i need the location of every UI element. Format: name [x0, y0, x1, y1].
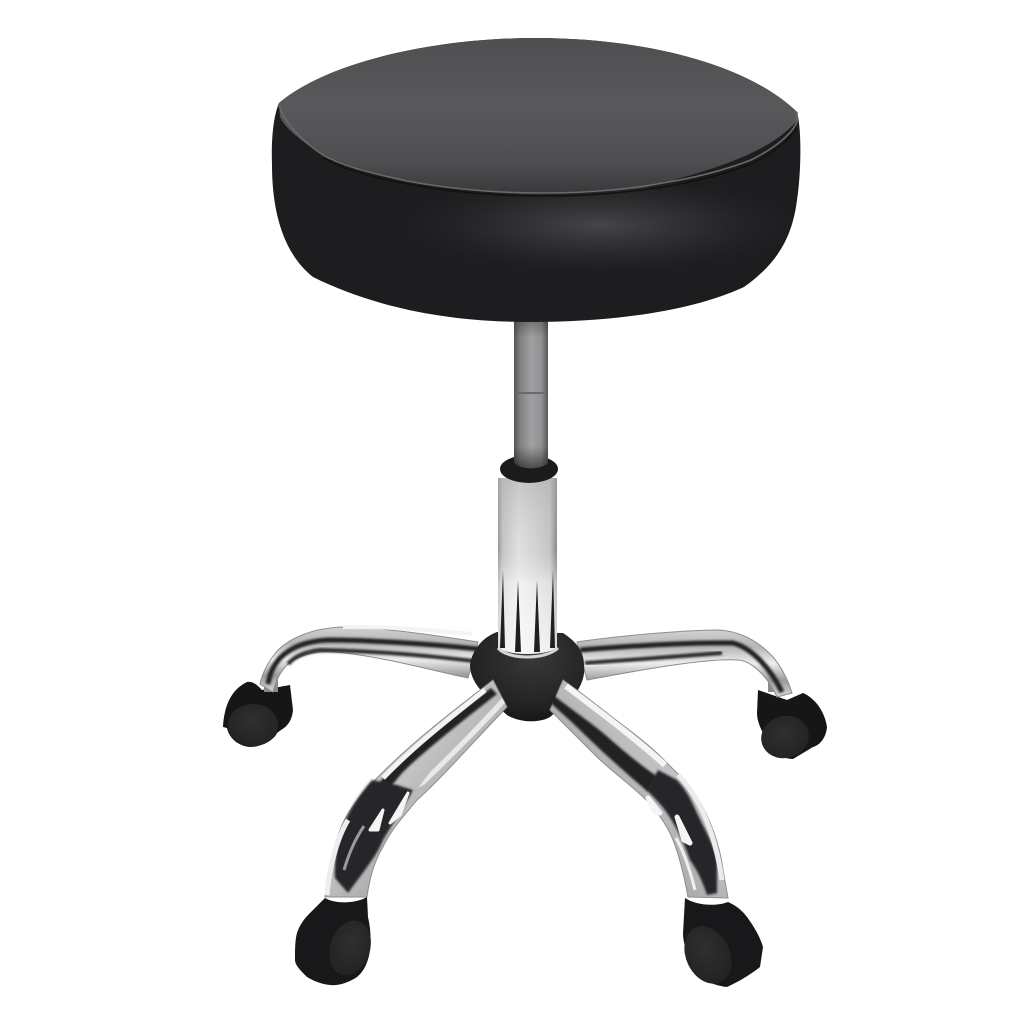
- caster: back left: [223, 678, 293, 747]
- caster: front left: [295, 897, 378, 985]
- stool photo illustration: [223, 38, 827, 987]
- seat cushion: [272, 38, 800, 322]
- leg: back right: [577, 630, 792, 697]
- chrome cylinder: [498, 478, 558, 657]
- gas lift rod: [514, 320, 548, 468]
- caster: front right: [675, 898, 763, 991]
- leg: front right: [550, 680, 728, 898]
- caster: back right: [756, 678, 827, 763]
- seat: seam: [279, 105, 797, 193]
- seat: top surface: [279, 38, 797, 193]
- seat: side highlight: [464, 191, 735, 258]
- leg bend reflection: [335, 780, 413, 893]
- leg bend reflection: [647, 770, 717, 895]
- base hub: [470, 632, 584, 721]
- seat: side wall: [272, 38, 800, 322]
- collar: [500, 455, 558, 483]
- leg: front left: [325, 680, 507, 897]
- leg: back left: [260, 627, 478, 692]
